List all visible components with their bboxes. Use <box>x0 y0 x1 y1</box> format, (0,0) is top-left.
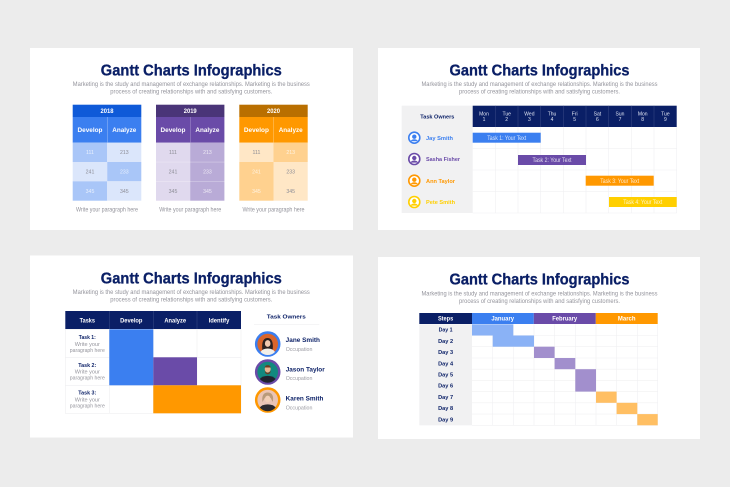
owner: Sasha Fisher: Sasha Fisher <box>426 157 461 163</box>
heading: Gantt Charts Infographics <box>450 62 630 79</box>
table: 2020: 111 <box>252 150 260 156</box>
table header <box>65 311 241 329</box>
task 3 label: Task 3: <box>78 390 96 396</box>
task 1 label <box>70 335 105 354</box>
march bars <box>596 392 658 425</box>
table: 2020: 345 <box>252 189 261 195</box>
analyze bar <box>153 357 197 385</box>
bar: task 3 <box>586 176 654 186</box>
day header: Tue <box>661 112 670 118</box>
february bars <box>534 347 596 392</box>
bar: task 1: Task 1: Your Text <box>487 136 526 142</box>
task table <box>65 311 241 413</box>
day header: 4 <box>551 117 554 123</box>
table header: Identify <box>209 317 230 324</box>
description: Marketing is the study and management of exchange relationships. Marketing is the business <box>73 289 310 296</box>
bar: task 4 <box>609 197 677 207</box>
day labels: Day 9 <box>438 417 454 423</box>
person: Jason Taylor <box>255 359 325 385</box>
day labels: Day 7 <box>438 395 453 401</box>
table: 2018: 241 <box>86 170 94 176</box>
table: 2018: Develop <box>78 127 103 134</box>
task 2 label: paragraph here <box>70 376 105 382</box>
bar: task 1 <box>473 133 541 143</box>
day header: Sun <box>616 112 625 118</box>
owners column <box>402 106 473 213</box>
task 3 label: paragraph here <box>70 403 105 409</box>
day header: Sat <box>594 112 602 118</box>
table: 2020: 213 <box>286 150 295 156</box>
day header: 3 <box>528 117 531 123</box>
task 2 label: Task 2: <box>78 363 96 369</box>
day labels: Day 1 <box>439 328 453 334</box>
owner: Pete Smith: Pete Smith <box>426 200 455 206</box>
person: Karen Smith: Occupation <box>286 405 312 411</box>
owners header: Task Owners <box>420 114 454 120</box>
owner: Jay Smith: Jay Smith <box>426 136 453 142</box>
identify bar <box>153 385 241 413</box>
table: 2019: 241 <box>169 170 177 176</box>
day header: Wed <box>524 112 535 118</box>
description: Marketing is the study and management of exchange relationships. Marketing is the business <box>422 81 658 88</box>
day header: 9 <box>664 117 667 123</box>
table: 2018: 345 <box>86 189 94 195</box>
table: 2019: 233 <box>203 170 212 176</box>
table: 2019: 2019 <box>184 108 197 115</box>
panel: task owners weekly gantt <box>378 48 700 230</box>
person: Jane Smith: Jane Smith <box>286 337 320 344</box>
panel: yearly tables <box>30 48 353 230</box>
day header: Mon <box>479 112 489 118</box>
task 1 label: paragraph here <box>70 348 105 354</box>
table: 2019: Develop <box>160 127 186 134</box>
day header: Tue <box>502 112 511 118</box>
description: process of creating relationships with and satisfying customers. <box>459 298 620 305</box>
description <box>73 289 310 304</box>
description: process of creating relationships with and satisfying customers. <box>459 89 620 96</box>
person: Jason Taylor: Occupation <box>286 376 312 382</box>
panel: tasks matrix and owners <box>30 256 353 438</box>
table: 2018 <box>73 105 141 201</box>
day labels: Day 3 <box>438 350 454 356</box>
day labels: Day 5 <box>438 372 454 378</box>
table: 2019: 213 <box>203 150 212 156</box>
header row <box>419 313 658 324</box>
owner: Ann Taylor <box>409 175 456 186</box>
day header: 2 <box>505 117 508 123</box>
table: 2019 <box>156 105 224 201</box>
bar: task 3: Task 3: Your Text <box>600 179 639 185</box>
captions: Write your paragraph here <box>242 206 305 213</box>
description <box>73 81 310 96</box>
description: Marketing is the study and management of exchange relationships. Marketing is the business <box>422 290 658 298</box>
table: 2020: Develop <box>244 127 269 134</box>
description <box>422 290 658 305</box>
description <box>422 81 658 96</box>
person: Jane Smith <box>255 331 320 357</box>
header row: March <box>618 316 636 323</box>
table: 2018: 345 <box>120 189 129 195</box>
table: 2019: 345 <box>169 189 177 195</box>
table: 2019: 111 <box>169 150 177 156</box>
table: 2020: Analyze <box>279 127 303 134</box>
table: 2018: 111 <box>86 150 94 156</box>
day header <box>473 106 677 127</box>
task owners heading: Task Owners <box>267 315 306 321</box>
table: 2018: 233 <box>120 170 129 176</box>
day labels: Day 4 <box>438 361 454 367</box>
develop bar <box>109 329 153 385</box>
table header: Tasks <box>80 317 95 324</box>
task 3 label <box>70 390 105 409</box>
table: 2018: Analyze <box>112 127 137 134</box>
person: Karen Smith: Karen Smith <box>286 396 323 403</box>
table: 2018: 213 <box>120 150 129 156</box>
day labels: Day 8 <box>438 406 454 412</box>
day header: 6 <box>596 117 599 123</box>
captions <box>76 206 305 213</box>
task 2 label: Write your <box>75 370 100 376</box>
table: 2020: 345 <box>286 189 295 195</box>
task 1 label: Write your <box>75 342 100 348</box>
bar: task 2 <box>518 155 586 165</box>
january bars <box>472 324 534 347</box>
description: Marketing is the study and management of exchange relationships. Marketing is the business <box>73 81 310 88</box>
captions: Write your paragraph here <box>76 206 138 213</box>
captions: Write your paragraph here <box>159 206 222 213</box>
day header: Fri <box>572 112 578 118</box>
table header: Develop <box>120 317 143 324</box>
day header: 7 <box>619 117 622 123</box>
day header: Mon <box>638 112 648 118</box>
day header: Thu <box>548 112 557 118</box>
person: Jason Taylor: Jason Taylor <box>286 366 325 373</box>
day labels: Day 2 <box>438 339 453 345</box>
day header: 8 <box>641 117 644 123</box>
heading: Gantt Charts Infographics <box>101 270 282 287</box>
owner: Jay Smith <box>409 132 453 143</box>
table: 2019: Analyze <box>195 127 220 134</box>
owner: Sasha Fisher <box>409 154 461 164</box>
table: 2020: 233 <box>286 170 295 176</box>
person: Jane Smith: Occupation <box>286 347 312 353</box>
task 1 label: Task 1: <box>79 335 96 341</box>
bar: task 2: Task 2: Your Text <box>532 158 572 164</box>
task 3 label: Write your <box>75 397 100 403</box>
day labels: Day 6 <box>438 384 454 390</box>
table: 2020: 241 <box>252 170 261 176</box>
table: 2019: 345 <box>203 189 212 195</box>
person: Karen Smith <box>255 387 323 413</box>
heading: Gantt Charts Infographics <box>450 272 630 289</box>
table: 2020 <box>239 105 308 201</box>
task 2 label <box>70 363 105 382</box>
table header: Analyze <box>164 317 186 324</box>
day labels <box>419 324 472 425</box>
description: process of creating relationships with and satisfying customers. <box>110 89 273 96</box>
heading: Gantt Charts Infographics <box>101 62 282 79</box>
header row: Steps <box>438 316 454 323</box>
owner: Ann Taylor: Ann Taylor <box>426 179 456 185</box>
header row: January <box>491 316 514 323</box>
day header: 5 <box>573 117 576 123</box>
description: process of creating relationships with and satisfying customers. <box>110 297 273 304</box>
panel: monthly step gantt <box>378 257 700 439</box>
table: 2018: 2018 <box>100 108 114 115</box>
table: 2020: 2020 <box>267 108 280 115</box>
owner: Pete Smith <box>409 196 455 208</box>
header row: February <box>552 316 578 323</box>
bar: task 4: Task 4: Your Text <box>623 200 663 206</box>
day header: 1 <box>483 117 486 123</box>
